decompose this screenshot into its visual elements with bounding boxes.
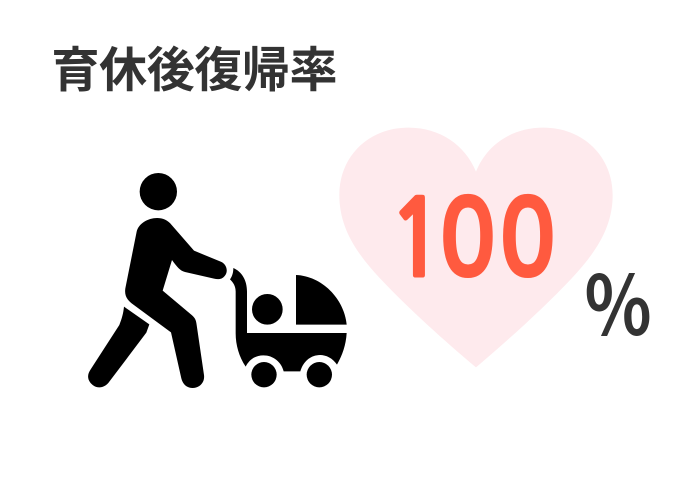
icon: parent pushing stroller <box>88 173 347 388</box>
icon part: parent body and front leg <box>125 218 227 388</box>
title: 育休後復帰率 <box>52 30 338 100</box>
icon part: stroller handle and basket <box>230 268 347 371</box>
heart <box>339 128 613 367</box>
icon part: parent rear leg <box>88 307 149 387</box>
percent sign: % <box>584 240 652 359</box>
icon part: left wheel <box>251 362 277 387</box>
icon part: parent head <box>140 173 177 210</box>
icon part: stroller hood <box>296 275 347 325</box>
value: 100: 100 <box>388 188 556 293</box>
icon part: baby head <box>252 294 283 325</box>
icon part: right wheel <box>307 362 332 387</box>
